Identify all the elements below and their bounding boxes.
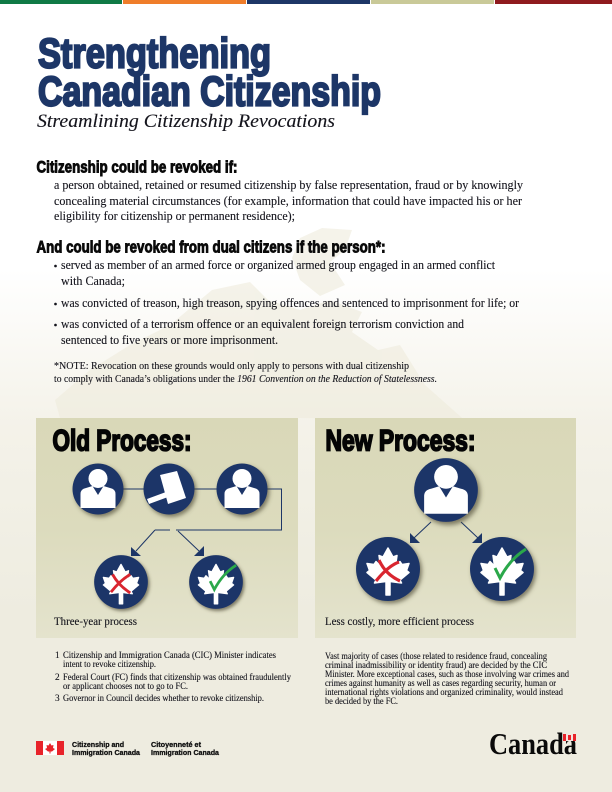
numbered list: old process steps: Citizenship and Immigration Canada (CIC) Minister indicates: [63, 650, 276, 661]
heading: dual citizens: And could be revoked from dual citizens if the person*:: [36, 238, 386, 256]
icon: person: [72, 464, 124, 514]
heading: old process: Old Process:: [52, 424, 192, 458]
text block: new process explanation: crimes against humanity as well as cases regarding security, human or: [325, 679, 557, 689]
numbered list: old process steps: or applicant chooses not to go to FC.: [63, 682, 188, 692]
bullet list: dual citizen grounds: [54, 257, 520, 347]
icon: maple leaf with red x: [356, 537, 420, 601]
bullet list: dual citizen grounds: was convicted of treason, high treason, spying offences and sentenced to imprisonment for life; or: [61, 295, 520, 310]
numbered list: old process steps: 2: [55, 673, 60, 683]
icon: maple leaf with red x: [94, 555, 148, 609]
department name english: Citizenship and: [72, 740, 124, 749]
text block: new process explanation: criminal inadmissibility or identity fraud) are decided by the CIC: [325, 660, 547, 671]
caption: three-year process: Three-year process: [54, 616, 137, 628]
department name english: Immigration Canada: [72, 748, 141, 757]
icon: maple leaf with green check: [189, 555, 243, 609]
department name french: [151, 740, 220, 757]
title: [38, 30, 381, 114]
icon: person: [216, 464, 268, 514]
watermark map of Canada: [55, 228, 470, 425]
arrowheads: [410, 533, 482, 543]
text block: new process explanation: [325, 651, 569, 707]
text block: new process explanation: international rights violations and organized criminality, would instead: [325, 688, 563, 698]
title: Strengthening: [38, 30, 271, 76]
text block: revocation grounds: concealing material circumstances (for example, information that could have impacted his or her: [54, 193, 523, 208]
text block: new process explanation: Vast majority of cases (those related to residence fraud, concealing: [325, 651, 547, 662]
numbered list: old process steps: [55, 650, 291, 704]
arrowheads: [131, 546, 204, 556]
department name french: Citoyenneté et: [151, 740, 201, 749]
bullet list: dual citizen grounds: served as member of an armed force or organized armed group engaged in an armed conflict: [61, 257, 495, 272]
numbered list: old process steps: 1: [55, 651, 60, 661]
panel: old process: [36, 418, 298, 638]
logo: canadian flag signature: [36, 741, 64, 755]
bullet list: dual citizen grounds: sentenced to five years or more imprisonment.: [61, 332, 278, 347]
icon: gavel: [144, 464, 194, 514]
logo: canada wordmark: Canada: [489, 726, 577, 761]
text block: new process explanation: Minister. More exceptional cases, such as those involving war crimes and: [325, 670, 569, 680]
text block: new process explanation: be decided by the FC.: [325, 697, 398, 707]
caption: less costly: Less costly, more efficient process: [325, 616, 474, 628]
note: *NOTE: Revocation on these grounds would only apply to persons with dual citizenship: [54, 360, 409, 372]
department name french: Immigration Canada: [151, 748, 220, 757]
icon: maple leaf with green check: [470, 537, 534, 601]
note: to comply with Canada’s obligations under the 1961 Convention on the Reduction of Statelessness.: [54, 373, 437, 385]
department name english: [72, 740, 141, 757]
icon: person: [414, 458, 478, 522]
heading: new process: New Process:: [326, 424, 476, 458]
numbered list: old process steps: intent to revoke citizenship.: [63, 660, 156, 670]
subtitle: Streamlining Citizenship Revocations: [37, 111, 335, 132]
connector lines: [98, 489, 282, 551]
heading: citizenship could be revoked: Citizenship could be revoked if:: [36, 158, 238, 176]
text block: revocation grounds: a person obtained, retained or resumed citizenship by false representation, fraud or by knowingly: [54, 177, 523, 192]
text block: revocation grounds: eligibility for citizenship or permanent residence);: [54, 208, 295, 223]
connector lines: [414, 522, 478, 538]
text block: revocation grounds: [54, 177, 523, 223]
bullet list: dual citizen grounds: with Canada;: [61, 273, 125, 288]
numbered list: old process steps: 3: [55, 694, 60, 704]
numbered list: old process steps: Federal Court (FC) finds that citizenship was obtained fraudulently: [63, 672, 291, 683]
note: [54, 360, 437, 385]
colour bars: [0, 0, 612, 4]
bullet list: dual citizen grounds: was convicted of a terrorism offence or an equivalent foreign terrorism conviction and: [61, 316, 464, 331]
title: Canadian Citizenship: [38, 68, 381, 114]
panel: new process: [315, 418, 576, 638]
numbered list: old process steps: Governor in Council decides whether to revoke citizenship.: [63, 694, 264, 704]
